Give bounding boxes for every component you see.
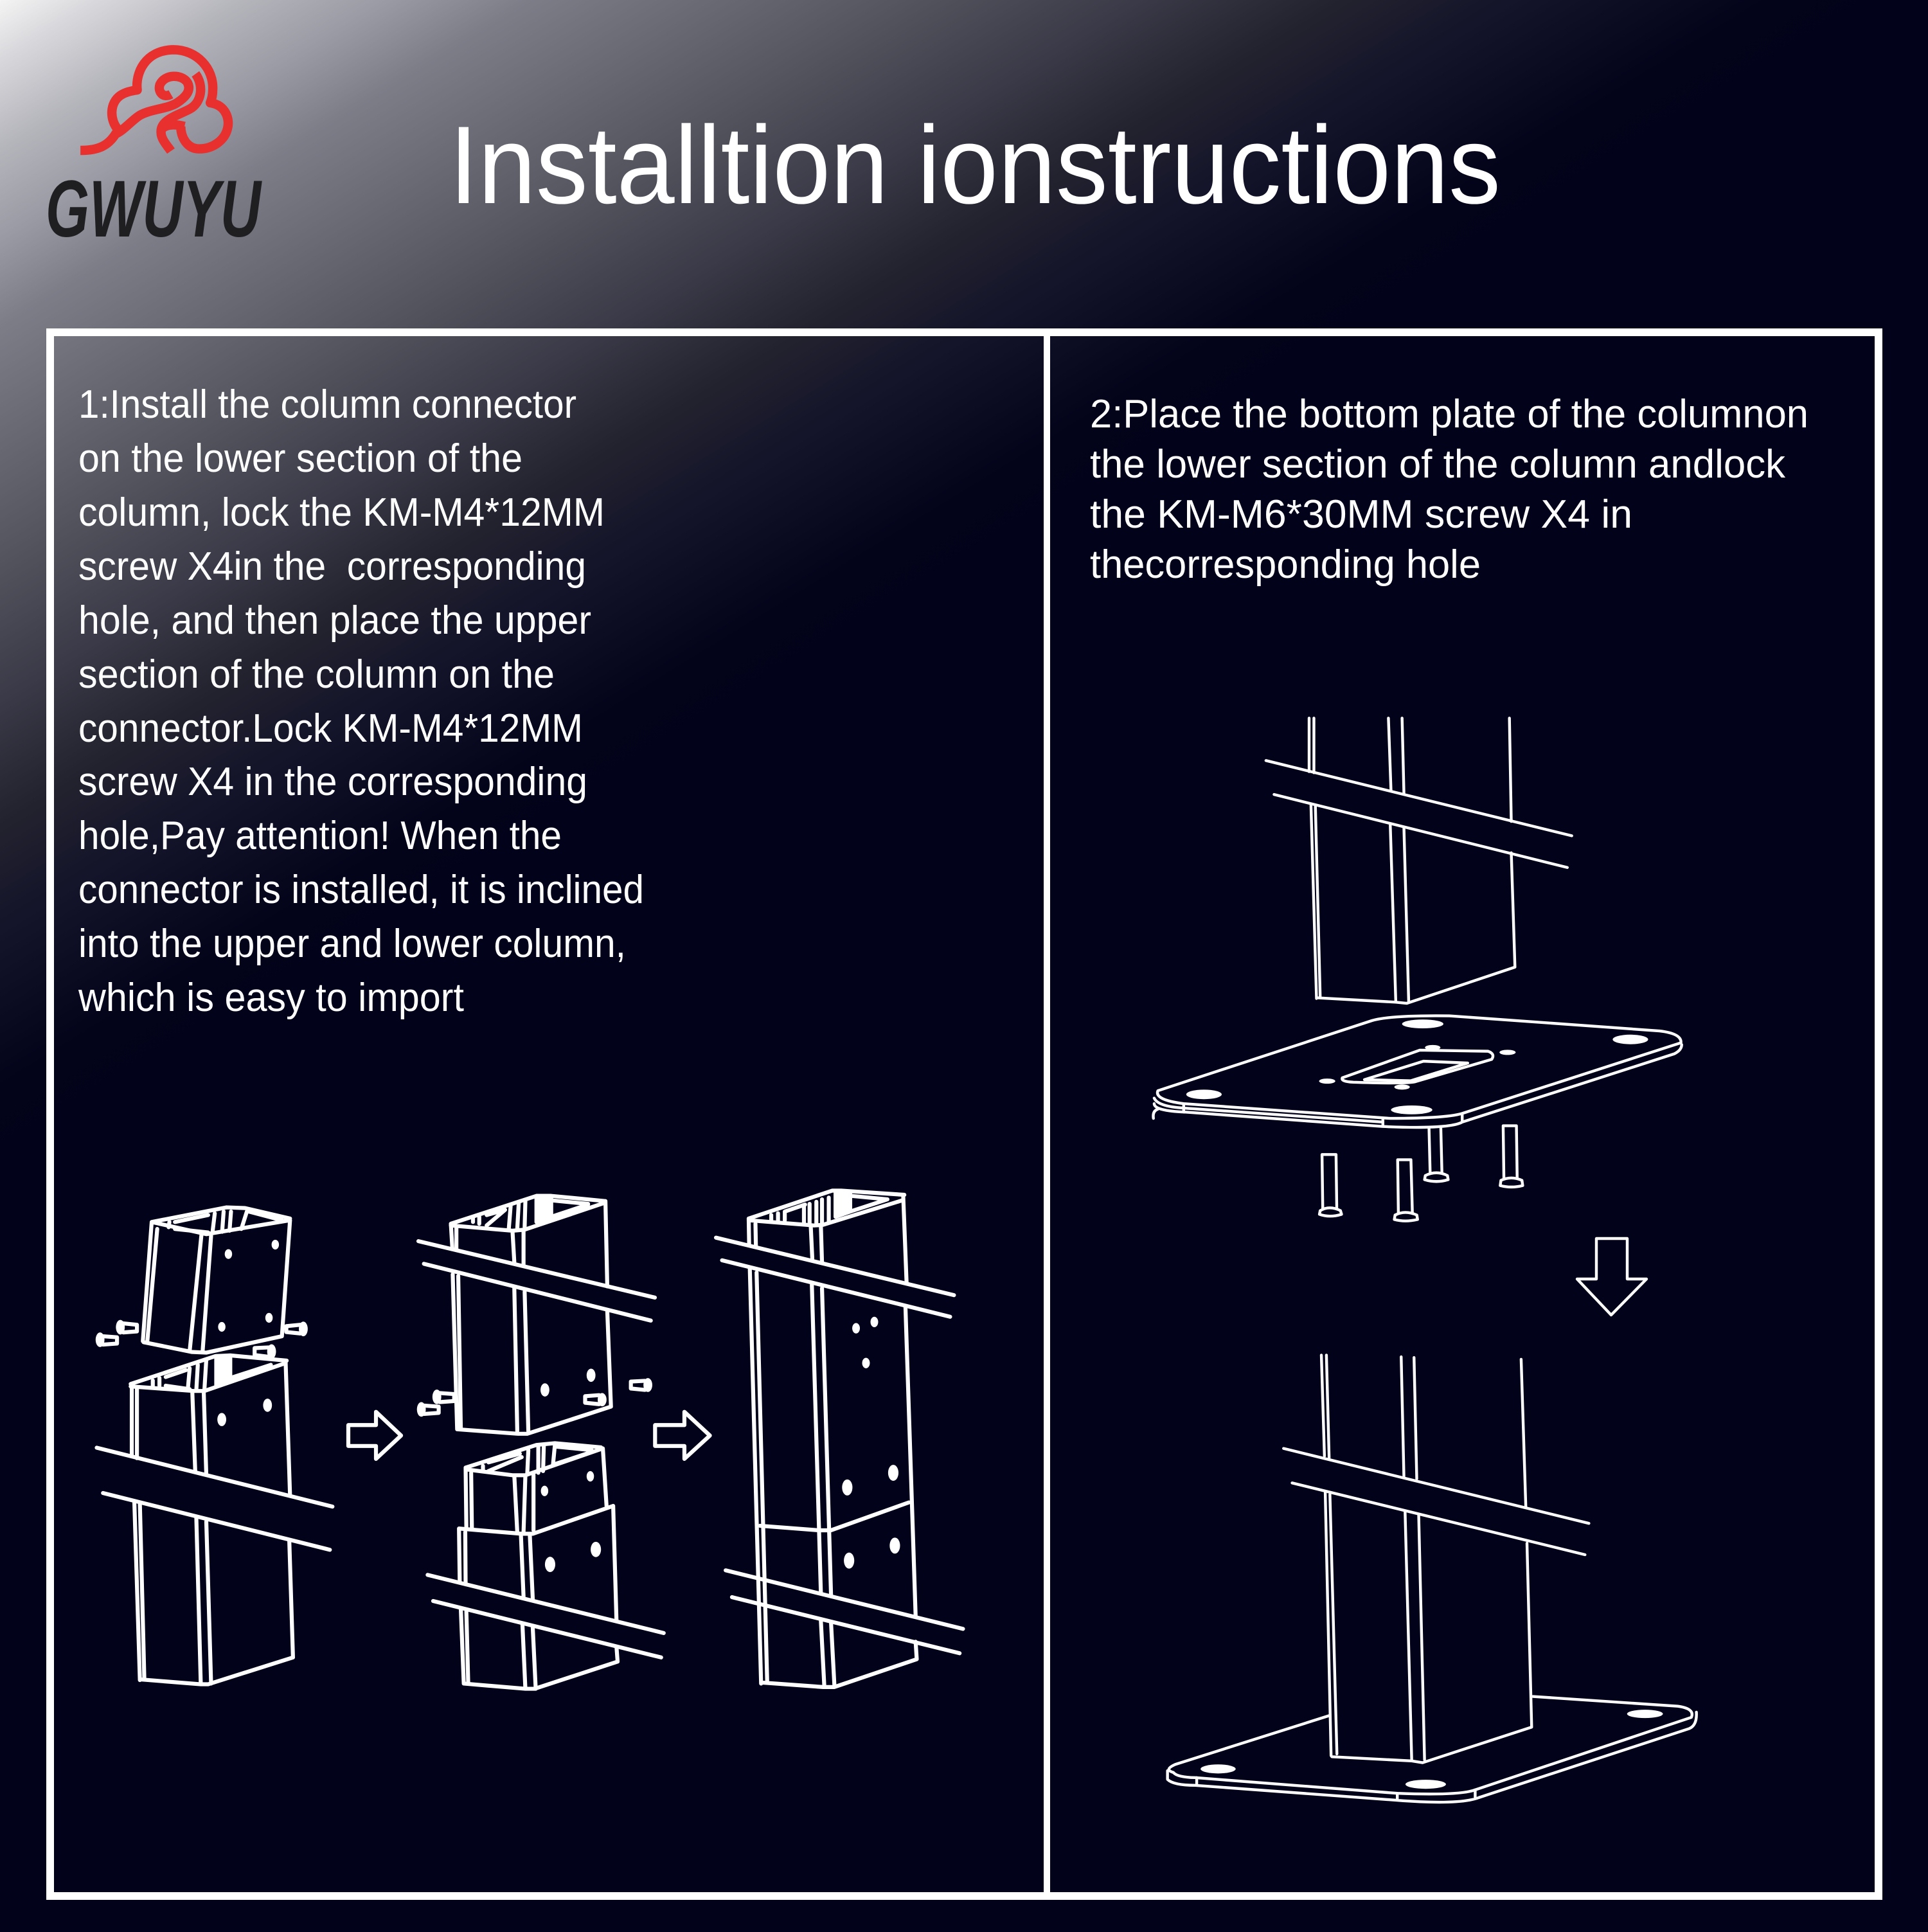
text block: step 1: screw X4in the corresponding [78,544,586,589]
text block: step 1: on the lower section of the [78,436,522,481]
assembled column with bands [716,1191,963,1687]
text block: step 2: 2:Place the bottom plate of the columnon [1090,392,1808,436]
upper column with band and screws [417,1196,655,1434]
panel frame with two columns [50,332,1879,1896]
arrow down [1577,1239,1647,1315]
mounted base plate [1168,1697,1697,1802]
column with band [1266,718,1572,1003]
text block: step 2 [1090,392,1808,587]
screws [1319,1126,1522,1221]
text block: step 1: hole, and then place the upper [78,598,591,643]
text block: step 1: section of the column on the [78,652,555,697]
arrow right [348,1412,401,1459]
text block: step 1: connector.Lock KM-M4*12MM [78,706,583,751]
connector in lower column with band [427,1443,664,1689]
text block: step 1: hole,Pay attention! When the [78,814,562,858]
logo: GWUYU [46,49,262,254]
text block: step 1: screw X4 in the corresponding [78,760,587,804]
base plate [1153,1015,1682,1127]
text block: step 2: the KM-M6*30MM screw X4 in [1090,492,1632,537]
text block: step 1: connector is installed, it is inclined [78,868,644,912]
text block: step 1: column, lock the KM-M4*12MM [78,490,605,535]
connector above column with screws [96,1208,308,1359]
column with band [1283,1355,1589,1763]
diagram: step 1 final assembled column [655,1191,963,1687]
diagram: step 2 column mounted on base plate [1168,1355,1697,1802]
arrow right [655,1412,710,1459]
text block: step 2: the lower section of the column andlock [1090,442,1786,487]
text block: step 1: into the upper and lower column, [78,922,626,966]
diagram: step 2 column above base plate with screws [1153,718,1682,1221]
title: Installtion ionstructions [449,103,1501,227]
text block: step 1: 1:Install the column connector [78,382,576,427]
text block: step 1 [78,382,644,1020]
text block: step 1: which is easy to import [78,976,464,1020]
diagram: step 1 first and second stages [96,1196,664,1689]
logo wordmark: GWUYU [46,165,262,254]
lower column with band [97,1355,332,1685]
icon: red cloud swirl [80,49,228,151]
text block: step 2: thecorresponding hole [1090,542,1481,587]
